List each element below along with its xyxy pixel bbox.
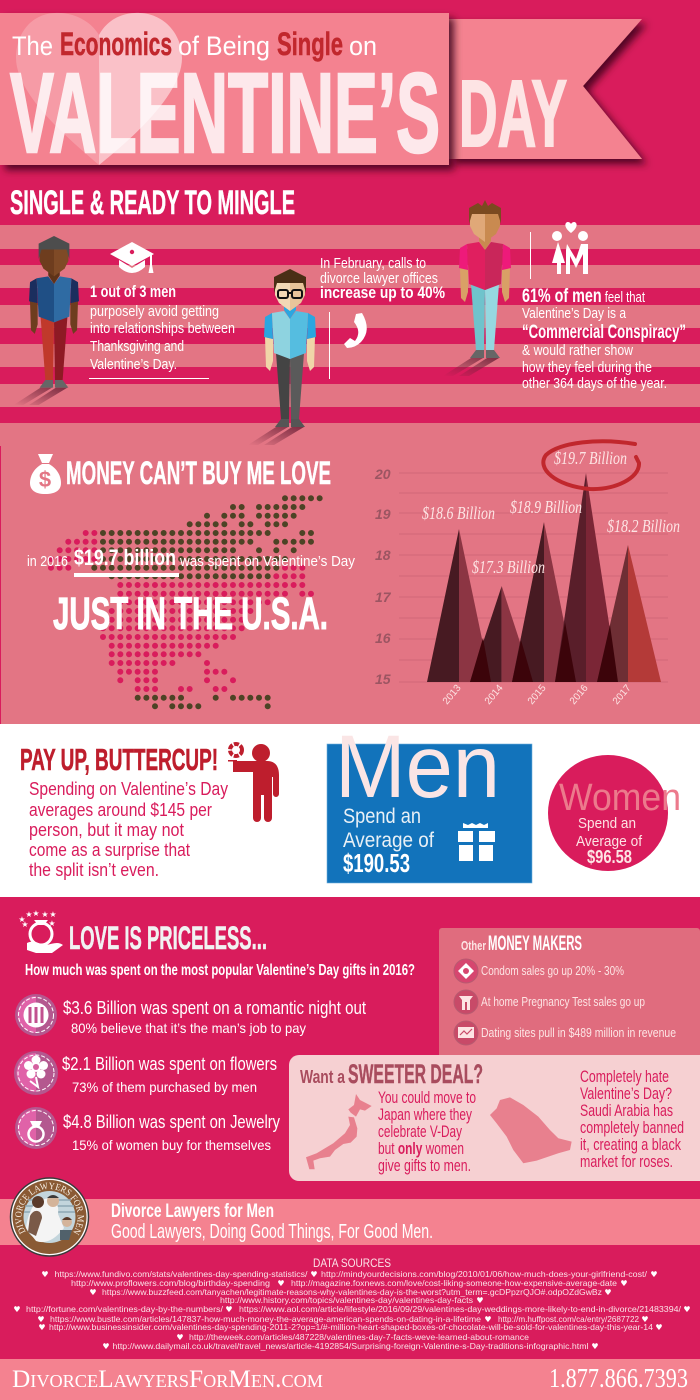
data sources: ♥ — [38, 1323, 46, 1332]
panel: women: Spend an — [578, 815, 636, 832]
panel: firm band — [0, 1199, 700, 1245]
map: dotted USA — [51, 498, 320, 706]
value labels — [422, 448, 680, 577]
text: 19.7 billion spent — [27, 545, 355, 577]
text: commercial conspiracy: Valentine’s Day is a — [522, 305, 627, 322]
year labels: 2015 — [526, 682, 549, 707]
logo seal: DIVORCE LAWYERS FOR MEN — [15, 1182, 84, 1236]
figure: man in glasses — [248, 269, 316, 445]
data sources: ♥ — [683, 1305, 691, 1314]
gift row: flowers: 73% of them purchased by men — [72, 1079, 257, 1095]
value labels: $17.3 Billion — [472, 557, 545, 577]
highlight brush ellipse — [543, 441, 639, 489]
data sources: https://www.buzzfeed.com/tanyachen/legitimate-reasons-why-valentines-day-is-the-worst?utm_term=.gcDPpzrQJO#.odpOZdGwBz — [102, 1287, 602, 1297]
icon: ring in hand: ★ — [41, 910, 49, 919]
text: 1 out of 3 men: purposely avoid getting — [90, 303, 219, 320]
data sources: ♥ — [89, 1288, 97, 1297]
text: 1 out of 3 men: 1 out of 3 men — [90, 282, 176, 301]
heading: want a sweeter deal: Want a — [300, 1067, 346, 1087]
panel: pay up — [0, 716, 700, 897]
text: divorce calls: increase up to 40% — [320, 283, 445, 302]
axis labels: 18 — [375, 547, 391, 563]
axis labels: 20 — [374, 466, 391, 482]
text: 19.7 billion spent: in 2016 — [27, 553, 68, 570]
text: Saudi Arabia: Completely hate — [580, 1067, 669, 1086]
data sources: ♥ — [650, 1270, 658, 1279]
panel: other money makers: At home Pregnancy Test sales go up — [481, 995, 645, 1009]
data sources: ♥ — [37, 1315, 45, 1324]
data sources: ♥ — [655, 1323, 663, 1332]
panel: other money makers — [439, 928, 700, 1058]
title line: The — [12, 31, 53, 61]
heading: money can't buy me love: MONEY CAN’T BUY ME LOVE — [66, 455, 331, 491]
heading: want a sweeter deal — [300, 1059, 483, 1089]
heading: want a sweeter deal: SWEETER DEAL? — [348, 1059, 483, 1089]
data sources: http://magazine.foxnews.com/love/cost-liking-someone-how-expensive-average-date — [291, 1278, 617, 1288]
title line — [12, 26, 377, 62]
text: 19.7 billion spent: was spent on Valentine’s Day — [179, 553, 355, 570]
data sources: http://mindyourdecisions.com/blog/2010/01/06/how-much-does-your-girlfriend-cost/ — [321, 1269, 648, 1279]
text: commercial conspiracy: other 364 days of the year. — [522, 375, 667, 392]
text: spending: the split isn’t even. — [29, 860, 159, 880]
text: Japan: Japan where they — [378, 1105, 472, 1124]
icon: flower — [14, 1051, 58, 1095]
gift row: night out: 80% believe that it’s the man’s job to pay — [71, 1020, 306, 1036]
text: Japan: give gifts to men. — [378, 1156, 471, 1175]
gift row: flowers: $2.1 Billion was spent on flowers — [62, 1054, 277, 1074]
axis labels: 15 — [375, 671, 391, 687]
gift row: night out: $3.6 Billion was spent on a romantic night out — [63, 998, 366, 1018]
gift row: jewelry: 15% of women buy for themselves — [72, 1137, 271, 1153]
panel: women — [548, 755, 681, 871]
panel: women: Women — [559, 777, 681, 819]
text: commercial conspiracy: & would rather show — [522, 342, 633, 359]
data sources: http://theweek.com/articles/487228/valentines-day-7-facts-weve-learned-about-romance — [189, 1332, 529, 1342]
panel: other money makers: Other — [461, 938, 486, 953]
axis labels — [374, 466, 392, 687]
panel: women: Average of — [576, 833, 643, 850]
data sources: ♥ — [225, 1305, 233, 1314]
figure: man in blue — [14, 236, 79, 405]
footer: DivorceLawyersForMen.com — [12, 1366, 323, 1393]
gift row: flowers — [14, 1051, 277, 1095]
icon: couple — [530, 222, 588, 279]
data sources: http://www.history.com/topics/valentines-day/valentines-day-facts — [220, 1295, 473, 1305]
gift row: jewelry: $4.8 Billion was spent on Jewelry — [63, 1112, 280, 1132]
year labels: 2013 — [441, 682, 464, 707]
ribbon tail — [449, 19, 642, 159]
axis labels: 16 — [375, 630, 391, 646]
text: Japan — [378, 1088, 476, 1175]
data sources: ♥ — [484, 1315, 492, 1324]
data sources: ♥ — [641, 1315, 649, 1324]
peaks — [427, 473, 661, 682]
value labels: $18.9 Billion — [510, 497, 582, 517]
data sources: ♥ — [13, 1305, 21, 1314]
panel: header — [0, 13, 642, 176]
icon: graduation cap — [110, 242, 154, 273]
icon: ring in hand: ★ — [21, 920, 29, 929]
data sources: https://www.aol.com/article/lifestyle/2016/09/29/valentines-day-weddings-more-likely-to-end-in-divorce/21483394/ — [239, 1304, 682, 1314]
icon: chart screen — [454, 1021, 478, 1045]
map: Japan — [306, 1094, 372, 1169]
value labels: $18.6 Billion — [422, 503, 495, 523]
value labels: $18.2 Billion — [607, 516, 680, 536]
value labels: $19.7 Billion — [554, 448, 627, 468]
logo seal — [10, 1177, 90, 1257]
data sources: ♥ — [310, 1270, 318, 1279]
text: spending: person, but it may not — [29, 820, 184, 840]
data sources: ♥ — [620, 1279, 628, 1288]
panel: women: $96.58 — [587, 847, 632, 867]
title line: on — [349, 31, 377, 61]
heading: pay up buttercup: PAY UP, BUTTERCUP! — [20, 742, 218, 777]
data sources: ♥ — [591, 1342, 599, 1351]
data sources: http://m.huffpost.com/ca/entry/2687722 — [498, 1314, 639, 1324]
text: spending: Spending on Valentine’s Day — [29, 779, 228, 799]
text: divorce calls — [320, 255, 445, 379]
icon: ring in hand: ★ — [32, 909, 40, 918]
icon: condom — [454, 959, 478, 983]
year labels — [441, 682, 634, 707]
gift row: jewelry — [15, 1107, 280, 1153]
gift row: night out — [15, 994, 366, 1036]
icon: ring — [15, 1107, 57, 1149]
banner — [0, 13, 449, 165]
title line: Economics — [60, 26, 172, 62]
icon: cutlery — [15, 994, 57, 1036]
icon: ring in hand: ★ — [18, 915, 26, 924]
icon: money bag: $ — [39, 467, 51, 492]
text: spending — [29, 779, 228, 880]
data sources: ♥ — [277, 1279, 285, 1288]
icon: ring in hand — [18, 909, 63, 953]
text: 1 out of 3 men: Valentine’s Day. — [90, 356, 177, 373]
panel: men: Average of — [343, 829, 434, 852]
panel: men: Spend an — [343, 805, 421, 828]
data sources: ♥ — [41, 1270, 49, 1279]
title line: of Being — [178, 31, 270, 61]
panel: other money makers: MONEY MAKERS — [488, 932, 582, 955]
text: commercial conspiracy: 61% of men feel that — [522, 286, 646, 307]
heading: just in the USA: JUST IN THE U.S.A. — [53, 588, 328, 639]
text: Japan: You could move to — [378, 1088, 476, 1107]
map: Saudi Arabia — [490, 1097, 572, 1163]
year labels: 2016 — [568, 682, 591, 707]
data sources: ♥ — [604, 1288, 612, 1297]
panel: firm band: Divorce Lawyers for Men — [111, 1201, 274, 1222]
data sources: http://www.dailymail.co.uk/travel/travel_news/article-4192854/Surprising-foreign-Valentine-s-Day-traditions-infographic.html — [112, 1341, 589, 1351]
panel: sweeter deal — [289, 1055, 700, 1181]
data sources — [13, 1256, 691, 1351]
text: 1 out of 3 men: Thanksgiving and — [90, 338, 184, 355]
heart — [16, 13, 182, 165]
icon: phone — [344, 313, 367, 348]
icon: money bag — [30, 454, 61, 494]
data sources: https://www.bustle.com/articles/147837-how-much-money-the-average-american-spends-on-dating-in-a-lifetime — [50, 1314, 481, 1324]
data sources: http://www.proflowers.com/blog/birthday-spending — [71, 1278, 270, 1288]
text: 19.7 billion spent: $19.7 billion — [74, 545, 176, 570]
text: commercial conspiracy: how they feel during the — [522, 359, 652, 376]
data sources: DATA SOURCES — [313, 1256, 391, 1270]
panel: men: $190.53 — [343, 848, 410, 878]
year labels: 2017 — [611, 682, 634, 707]
icon: ring in hand: ★ — [25, 910, 33, 919]
panel: firm band: Good Lawyers, Doing Good Things, For Good Men. — [111, 1221, 433, 1243]
footer — [0, 1359, 700, 1400]
text: 1 out of 3 men — [89, 282, 235, 379]
data sources: ♥ — [176, 1333, 184, 1342]
icon: pregnancy test — [454, 990, 478, 1014]
text: Japan: but only women — [378, 1139, 464, 1158]
text: Japan: celebrate V-Day — [378, 1122, 462, 1141]
panel: men: Men — [335, 716, 500, 816]
year labels: 2014 — [483, 682, 506, 707]
text: commercial conspiracy — [522, 286, 686, 392]
data sources: ♥ — [102, 1342, 110, 1351]
axis labels: 19 — [375, 506, 391, 522]
icon: ring in hand: ★ — [48, 919, 56, 928]
title line: Single — [277, 26, 343, 62]
text: divorce calls: divorce lawyer offices — [320, 270, 438, 287]
text: spending: come as a surprise that — [29, 840, 190, 860]
text: spending: averages around $145 per — [29, 800, 212, 820]
text: divorce calls: In February, calls to — [320, 255, 426, 272]
panel: other money makers: Condom sales go up 20% - 30% — [481, 964, 624, 978]
data sources: http://www.businessinsider.com/valentines-day-spending-2011-2?op=1/#-million-heart-shaped-boxes-of-chocolate-will-be-sold-for-valentines-day-this-year-14 — [49, 1322, 653, 1332]
icon: person with flower — [228, 744, 279, 822]
panel: men — [327, 716, 532, 883]
panel: striped background — [0, 225, 700, 724]
data sources: https://www.fundivo.com/stats/valentines-day-spending-statistics/ — [54, 1269, 308, 1279]
chart: spending by year — [374, 441, 680, 707]
icon: gift — [458, 823, 495, 861]
text: 1 out of 3 men: into relationships between — [90, 320, 235, 337]
subheading: gifts question: How much was spent on the most popular Valentine’s Day gifts in 2016? — [25, 962, 415, 979]
data sources: ♥ — [476, 1296, 484, 1305]
axis labels: 17 — [375, 589, 392, 605]
text: Saudi Arabia — [580, 1067, 684, 1171]
figure: man in pink — [443, 200, 511, 376]
heading: love is priceless: LOVE IS PRICELESS... — [69, 920, 267, 956]
icon: ring in hand: ★ — [49, 910, 57, 919]
title: Day: DAY — [459, 61, 567, 167]
heading: single and ready: SINGLE & READY TO MINGLE — [10, 184, 295, 222]
data sources: http://fortune.com/valentines-day-by-the-numbers/ — [26, 1304, 224, 1314]
